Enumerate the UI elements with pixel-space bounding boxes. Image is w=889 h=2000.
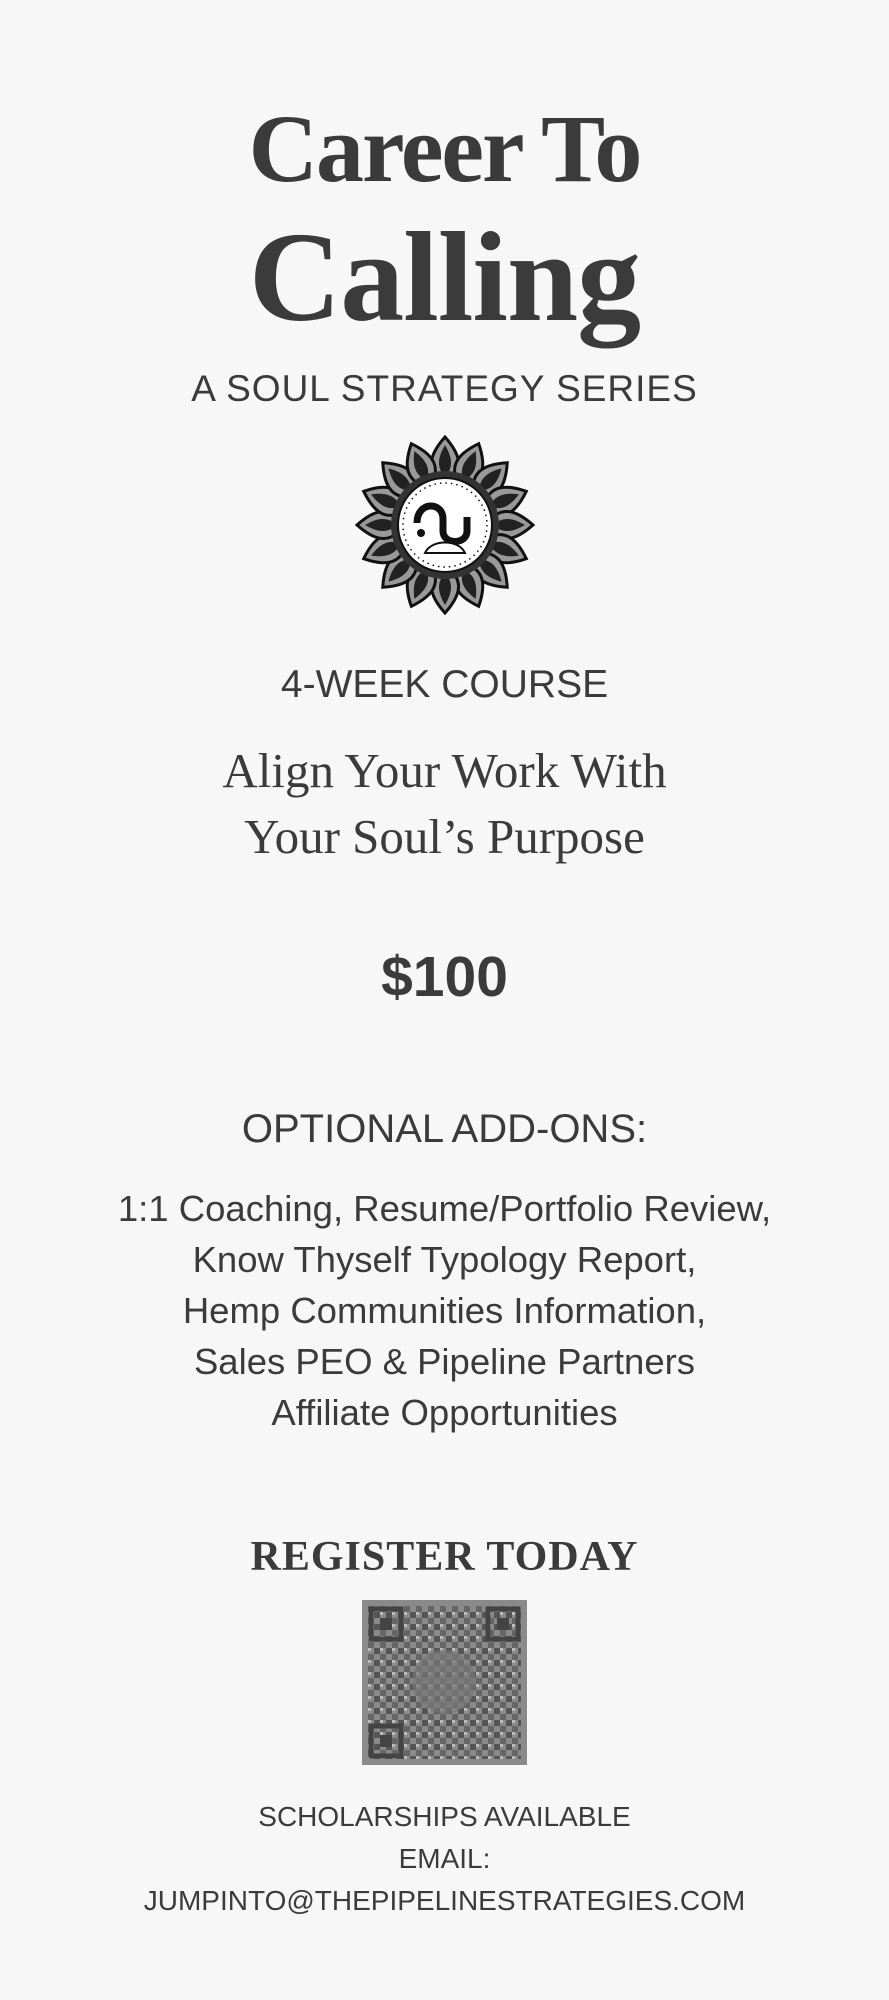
add-ons list [118,1188,771,1433]
add-ons list: Hemp Communities Information, [183,1290,706,1331]
QR code [362,1600,527,1765]
contact info: JUMPINTO@THEPIPELINESTRATEGIES.COM [144,1885,745,1916]
title line 2: Calling [249,206,640,348]
title: Career To [249,95,640,202]
contact info [144,1801,745,1916]
add-ons list: 1:1 Coaching, Resume/Portfolio Review, [118,1188,771,1229]
add-ons list: Affiliate Opportunities [271,1392,618,1433]
tagline: Your Soul’s Purpose [244,809,645,864]
subtitle: A SOUL STRATEGY SERIES [191,368,698,409]
icon: mandala logo [354,434,536,616]
price: $100 [381,945,508,1009]
contact info: SCHOLARSHIPS AVAILABLE [258,1801,631,1832]
add-ons list: Know Thyself Typology Report, [193,1239,696,1280]
tagline [222,743,667,864]
course label: 4-WEEK COURSE [281,663,608,706]
add-ons heading: OPTIONAL ADD-ONS: [242,1107,647,1151]
add-ons list: Sales PEO & Pipeline Partners [194,1341,695,1382]
register heading: REGISTER TODAY [251,1534,638,1580]
contact info: EMAIL: [399,1843,490,1874]
tagline: Align Your Work With [222,743,667,798]
